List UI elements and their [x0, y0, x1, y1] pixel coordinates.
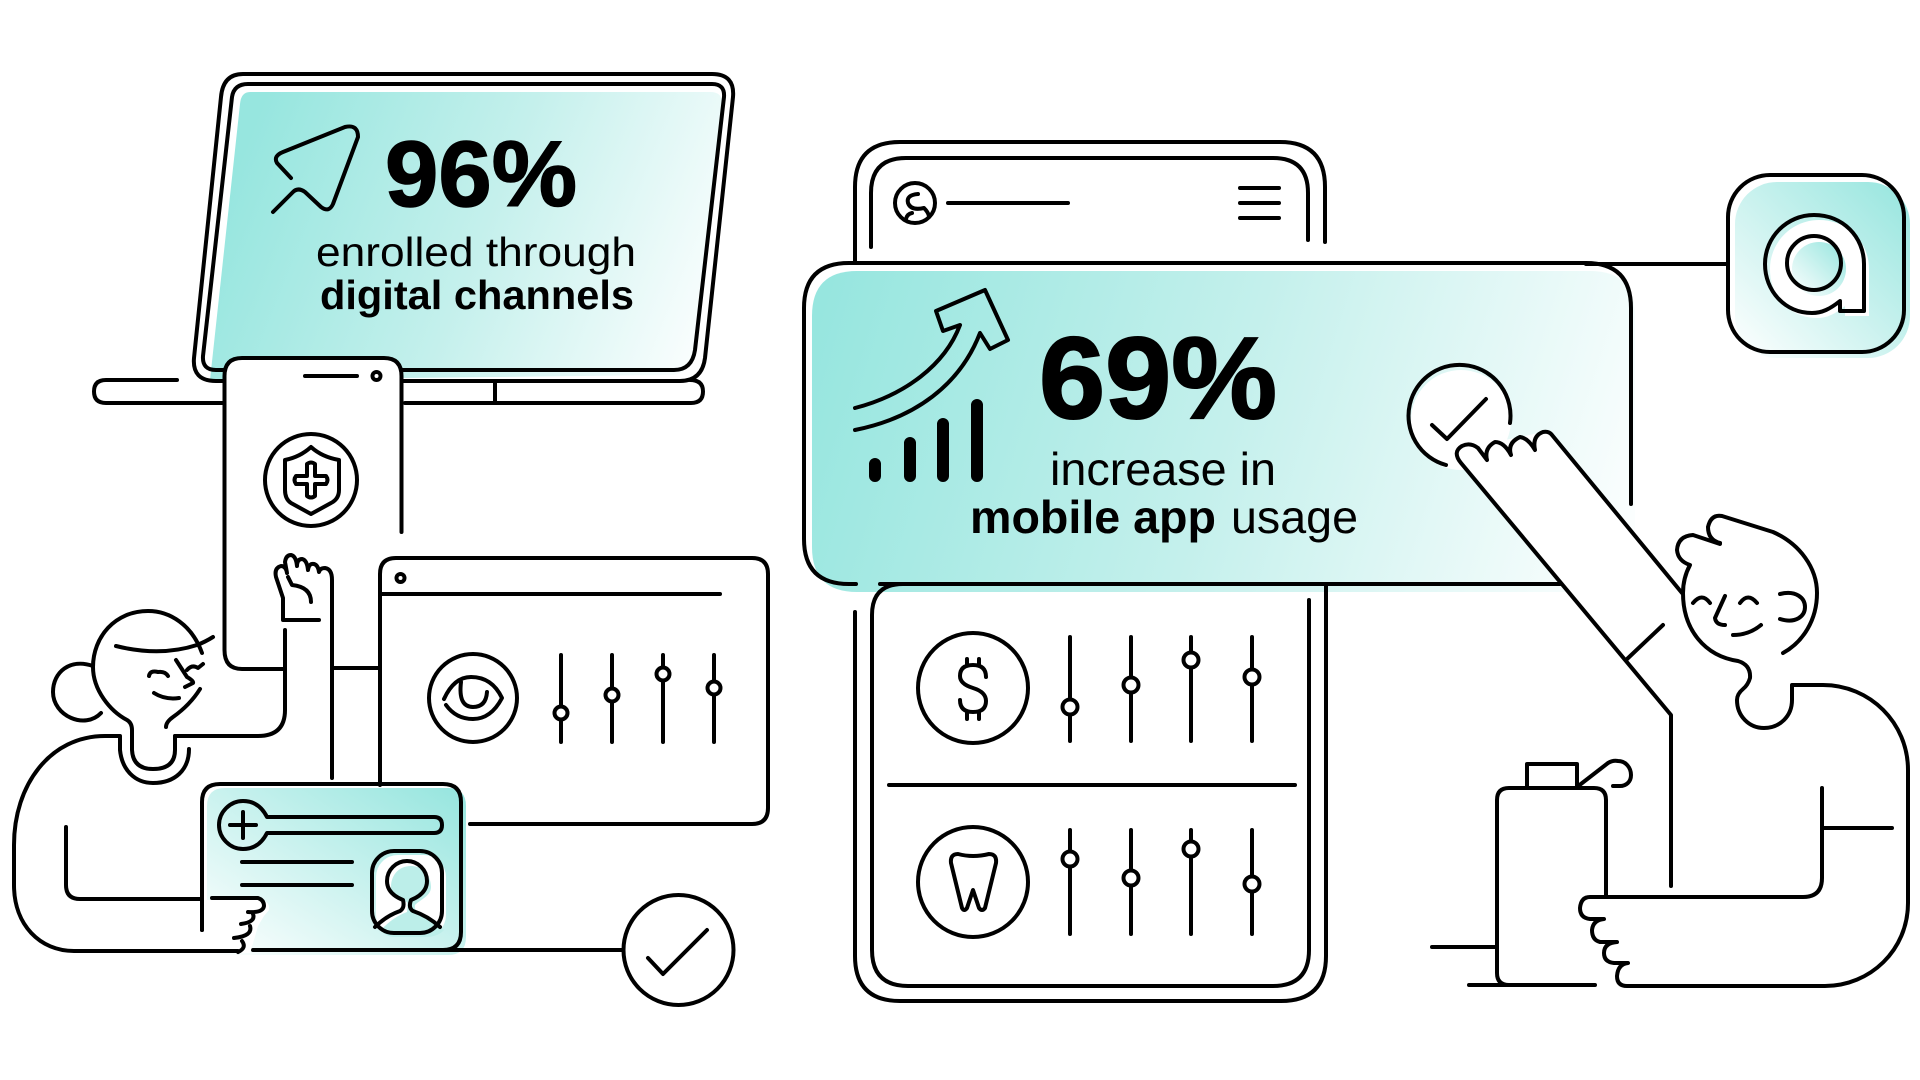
window dot [396, 574, 404, 582]
bottle [1432, 761, 1631, 985]
sliders row 1 [1062, 637, 1260, 741]
icon: app logo small [895, 183, 935, 223]
icon: app logo tile [1728, 175, 1910, 358]
hamburger menu [1240, 188, 1279, 218]
sliders row 2 [1062, 830, 1260, 934]
figure: man tapping and holding bottle [1432, 432, 1908, 986]
phone inner top [871, 158, 1308, 247]
panel: ID card [200, 784, 734, 1005]
pointing arm [1457, 432, 1700, 886]
panel: browser window with sliders [332, 558, 768, 824]
phone speaker [305, 374, 357, 378]
body [14, 736, 237, 951]
text: digital channels: digital channels [320, 272, 634, 318]
card fill [207, 788, 466, 955]
icon: shield with plus [265, 434, 357, 526]
body and holding arm [1580, 535, 1908, 986]
text: mobile app usage: mobile app [970, 491, 1216, 543]
phone body fill [224, 358, 402, 669]
hair bun [53, 664, 101, 720]
phone outer lower [855, 584, 1326, 1001]
head [93, 611, 202, 769]
panel: main stat card [804, 263, 1728, 592]
card fill [812, 271, 1635, 592]
connector [332, 666, 380, 670]
laptop inner frame [203, 84, 724, 370]
window outline [380, 558, 768, 824]
laptop screen fill [210, 92, 722, 380]
face [1693, 593, 1805, 635]
letter a counter [1787, 236, 1841, 290]
letter a white fill [1770, 220, 1869, 318]
panel: large phone [855, 142, 1325, 263]
face [149, 660, 203, 727]
phone camera [372, 372, 380, 380]
arm [175, 630, 285, 736]
letter a counter fill [1792, 242, 1846, 296]
tile fill [1735, 182, 1910, 358]
hand holding card [200, 898, 269, 953]
card outline [202, 784, 461, 950]
divider [889, 783, 1295, 787]
letter a outline [1765, 215, 1864, 313]
connector to app icon [1586, 262, 1728, 266]
window header line [380, 592, 720, 596]
icon: dollar [918, 633, 1028, 743]
card search bar [219, 801, 442, 849]
icon: tooth [918, 827, 1028, 937]
panel: large phone lower screen [855, 584, 1326, 1001]
icon: eye [429, 654, 517, 742]
card photo [372, 851, 446, 937]
stat: 69%: 69% [1039, 313, 1277, 443]
text: mobile app usage [970, 491, 1358, 543]
icon: tap check circle [1409, 365, 1511, 470]
nav line [948, 201, 1068, 205]
tile outline [1728, 175, 1904, 352]
laptop outer frame [194, 74, 733, 381]
head and hair [1708, 516, 1817, 653]
card bottom line [880, 582, 1560, 586]
phone outer top [855, 142, 1325, 263]
connector to check [440, 948, 623, 952]
hair line [116, 637, 213, 651]
icon: growth arrow [855, 290, 1008, 482]
icon: paper plane [273, 126, 358, 212]
text: increase in: increase in [1050, 443, 1276, 495]
phone outline [224, 358, 402, 669]
phone inner lower [872, 584, 1309, 986]
raised hand [276, 555, 332, 778]
panel: laptop [94, 74, 733, 403]
stat: 96%: 96% [385, 122, 577, 226]
card plus [230, 812, 256, 838]
figure: woman with raised hand [14, 555, 332, 951]
laptop base [94, 380, 703, 403]
icon: check circle [624, 895, 734, 1005]
card text lines [242, 862, 352, 885]
card outline [804, 263, 1631, 584]
text: mobile app usage: usage [1231, 491, 1358, 543]
sliders [554, 655, 720, 742]
text: enrolled through: enrolled through [316, 229, 636, 275]
panel: small phone [224, 358, 402, 669]
